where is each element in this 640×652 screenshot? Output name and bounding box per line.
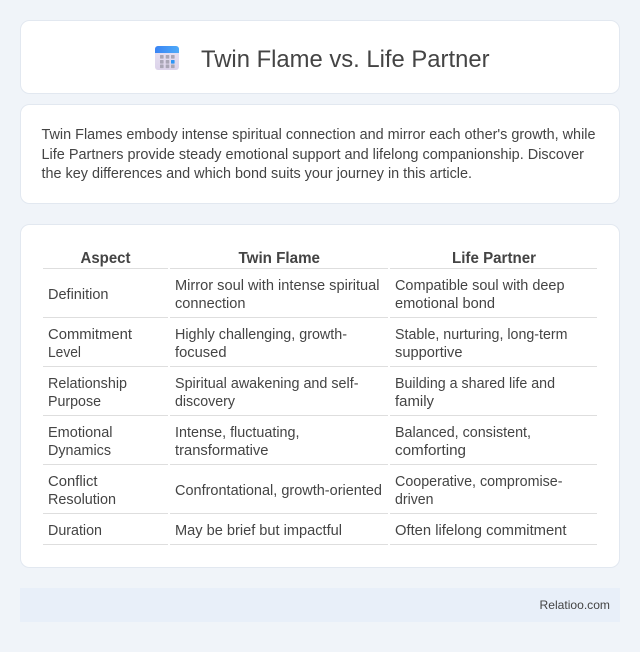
- row: definition: emotional bond: [395, 296, 495, 312]
- row: commitment level: [48, 327, 568, 361]
- row: relationship purpose: Spiritual awakening and self-: [175, 376, 359, 392]
- row: definition: connection: [175, 296, 246, 312]
- row: definition: Mirror soul with intense spiritual: [175, 278, 380, 294]
- row: commitment level: Commitment: [48, 327, 132, 343]
- row: conflict resolution: Confrontational, growth-oriented: [175, 483, 382, 499]
- row: duration: May be brief but impactful: [175, 523, 342, 539]
- row: emotional dynamics: Emotional: [48, 425, 112, 441]
- row: duration: [48, 523, 566, 539]
- panel: introduction: [20, 104, 620, 204]
- footer: [20, 588, 620, 622]
- table header row: [80, 250, 536, 267]
- text block: introduction copy: Life Partners provide steady emotional support and lifelong companionship. Discover: [42, 147, 584, 163]
- row: emotional dynamics: Dynamics: [48, 443, 111, 459]
- text block: introduction copy: [42, 127, 596, 182]
- row: relationship purpose: family: [395, 394, 435, 410]
- row: commitment level: Level: [48, 345, 81, 361]
- row: conflict resolution: Cooperative, compromise-: [395, 474, 563, 490]
- table header row: Twin Flame: [238, 250, 320, 267]
- row: relationship purpose: Purpose: [48, 394, 101, 410]
- row: relationship purpose: discovery: [175, 394, 236, 410]
- row: emotional dynamics: comforting: [395, 443, 466, 459]
- table header row: Aspect: [80, 250, 131, 267]
- row: definition: Compatible soul with deep: [395, 278, 564, 294]
- row: emotional dynamics: [48, 425, 531, 459]
- row: conflict resolution: Resolution: [48, 492, 116, 508]
- row: duration: Often lifelong commitment: [395, 523, 566, 539]
- text block: introduction copy: the key differences and which bond suits your journey in this article.: [42, 166, 472, 182]
- row: conflict resolution: Conflict: [48, 474, 98, 490]
- row: commitment level: Stable, nurturing, long-term: [395, 327, 568, 343]
- panel: title header: [20, 20, 620, 94]
- title: Twin Flame vs. Life Partner: [201, 46, 490, 73]
- row: duration: Duration: [48, 523, 102, 539]
- panel: comparison table: [20, 224, 620, 568]
- table header row: Life Partner: [452, 250, 536, 267]
- row: conflict resolution: [48, 474, 563, 508]
- row: commitment level: focused: [175, 345, 226, 361]
- icon: calendar: [155, 46, 179, 70]
- row: emotional dynamics: Intense, fluctuating,: [175, 425, 300, 441]
- row: definition: [48, 278, 564, 312]
- row: relationship purpose: Relationship: [48, 376, 127, 392]
- row: definition: Definition: [48, 287, 108, 303]
- row: emotional dynamics: Balanced, consistent,: [395, 425, 531, 441]
- row: relationship purpose: Building a shared life and: [395, 376, 555, 392]
- footer credit: Relatioo.com: [540, 598, 610, 612]
- row: commitment level: supportive: [395, 345, 462, 361]
- row: conflict resolution: driven: [395, 492, 434, 508]
- row: relationship purpose: [48, 376, 555, 410]
- row: emotional dynamics: transformative: [175, 443, 268, 459]
- text block: introduction copy: Twin Flames embody intense spiritual connection and mirror each other's growth, while: [42, 127, 596, 143]
- row: commitment level: Highly challenging, growth-: [175, 327, 347, 343]
